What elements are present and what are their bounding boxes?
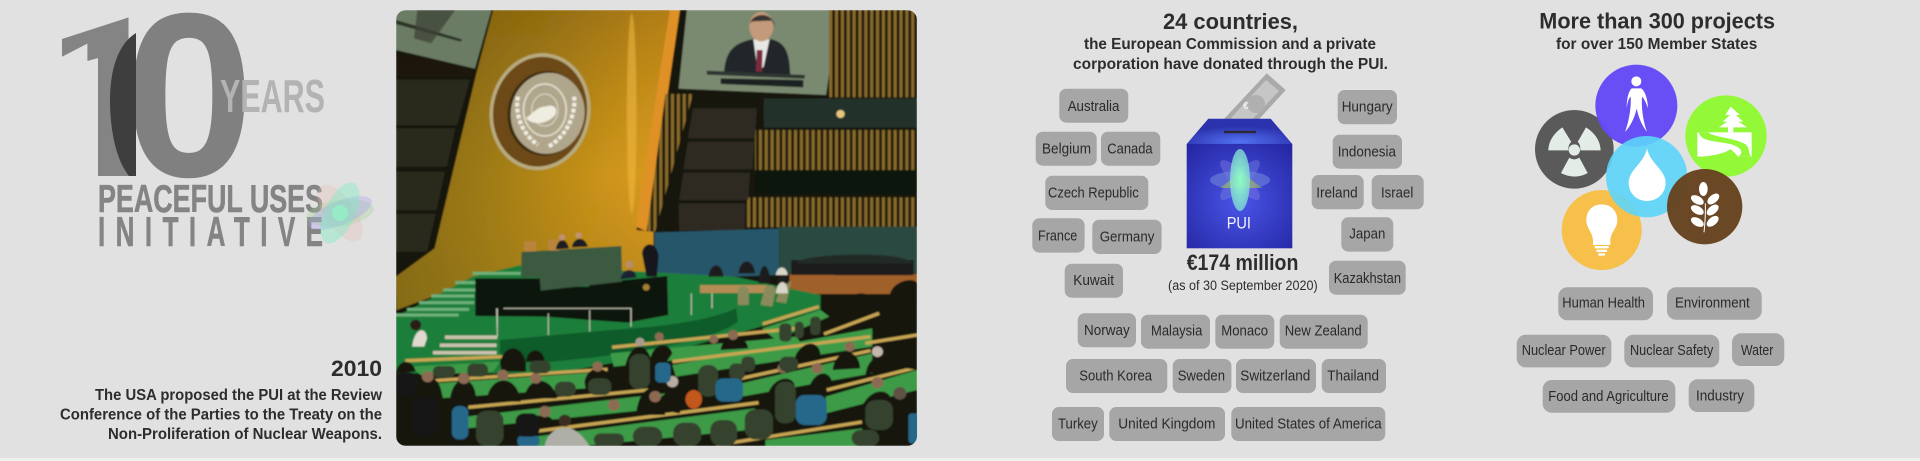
tag: Japan: Japan <box>1349 226 1385 242</box>
icon: nuclear power <box>1535 110 1614 189</box>
tag: Kazakhstan: Kazakhstan <box>1334 271 1401 287</box>
box front <box>1187 144 1292 248</box>
tag: Nuclear Power: Nuclear Power <box>1522 343 1606 359</box>
right wall stripes <box>829 10 917 97</box>
tag: Switzerland: Switzerland <box>1240 368 1310 384</box>
topic circles cluster <box>1535 65 1767 270</box>
tag: Sweden: Sweden <box>1178 368 1225 384</box>
YEARS label: YEARS <box>220 70 325 122</box>
tag: Water: Water <box>1741 343 1773 359</box>
tag: Japan <box>1341 217 1393 252</box>
icon: human health <box>1595 65 1677 147</box>
tag: United States of America: United States of America <box>1235 416 1383 432</box>
tag: Germany: Germany <box>1100 230 1155 246</box>
description: Non-Proliferation of Nuclear Weapons. <box>108 426 382 443</box>
tag: France <box>1032 218 1085 253</box>
tag: Switzerland <box>1236 359 1316 393</box>
INITIATIVE: INITIATIVE <box>98 209 323 256</box>
light suit <box>545 428 590 446</box>
gold wall <box>396 10 670 310</box>
tag: Nuclear Safety: Nuclear Safety <box>1630 343 1714 359</box>
gold desk edges <box>405 307 917 445</box>
PUI flower emblem <box>304 177 376 249</box>
PEACEFUL USES: PEACEFUL USES <box>98 178 323 221</box>
tag: South Korea <box>1066 359 1167 393</box>
heading: 24 countries <box>1073 9 1388 73</box>
tag: Kuwait <box>1065 264 1123 298</box>
left donor tags <box>1032 89 1162 298</box>
heading: More than 300 projects: More than 300 projects <box>1539 8 1775 33</box>
tag: Canada <box>1101 132 1160 166</box>
tag: Thailand <box>1322 359 1386 393</box>
tag: Hungary <box>1338 90 1397 124</box>
heads <box>410 320 906 417</box>
tag: Ireland <box>1312 175 1364 209</box>
total donated <box>1168 250 1318 293</box>
tag: Ireland: Ireland <box>1316 186 1358 202</box>
slot <box>1224 131 1256 133</box>
lower donor tags <box>1052 313 1386 441</box>
tag: Industry <box>1689 379 1754 412</box>
tag: Malaysia <box>1141 315 1210 349</box>
box label: PUI <box>1227 213 1251 232</box>
left dark wall panels <box>396 80 470 252</box>
year: 2010 <box>331 356 382 381</box>
tag: Food and Agriculture <box>1543 380 1675 413</box>
red hair delegate <box>685 390 702 409</box>
tag: Human Health: Human Health <box>1562 296 1645 312</box>
tag: Belgium <box>1036 132 1097 166</box>
tag: Thailand: Thailand <box>1327 368 1379 384</box>
tag: United States of America <box>1231 407 1385 441</box>
description: Conference of the Parties to the Treaty on the <box>60 406 382 424</box>
blue seats <box>452 363 918 446</box>
icon: banknote: € <box>1243 101 1249 112</box>
tag: South Korea: South Korea <box>1079 368 1153 384</box>
green desks <box>410 310 917 446</box>
tag: Australia: Australia <box>1068 99 1120 115</box>
booth window <box>764 98 917 128</box>
PUI flower on box <box>1210 149 1270 211</box>
tag: United Kingdom: United Kingdom <box>1118 416 1215 432</box>
tag: Environment: Environment <box>1675 296 1750 312</box>
green floor <box>396 265 821 373</box>
member states subheading: for over 150 Member States <box>1556 36 1757 53</box>
heading: 24 countries: 24 countries, <box>1163 9 1298 34</box>
icon: banknote <box>1224 73 1286 133</box>
seat backs <box>433 317 893 446</box>
tag: Food and Agriculture: Food and Agriculture <box>1548 389 1669 405</box>
donors subheading: corporation have donated through the PUI. <box>1073 56 1388 73</box>
donors subheading: the European Commission and a private <box>1084 36 1376 53</box>
photo: UN General Assembly hall <box>396 10 918 446</box>
tag: Czech Republic <box>1045 176 1148 210</box>
description: The USA proposed the PUI at the Review <box>95 387 383 404</box>
tag: Malaysia: Malaysia <box>1151 323 1203 339</box>
stairs <box>396 273 521 315</box>
numeral overlap shadow <box>110 33 136 176</box>
icon: industry <box>1562 190 1642 270</box>
box lid <box>1187 119 1292 144</box>
tag: Israel <box>1372 175 1424 209</box>
tag: Monaco: Monaco <box>1221 323 1268 339</box>
tag: Hungary: Hungary <box>1342 100 1393 116</box>
tag: United Kingdom <box>1109 407 1225 441</box>
tag: Norway <box>1078 313 1136 347</box>
right delegates <box>700 255 914 307</box>
icon: water <box>1606 136 1687 217</box>
tag: Turkey <box>1052 407 1104 441</box>
screens <box>396 10 491 69</box>
tag: New Zealand <box>1280 315 1368 349</box>
tag: Turkey: Turkey <box>1058 416 1098 432</box>
tag: Indonesia: Indonesia <box>1338 144 1397 160</box>
white-shirt delegate <box>412 330 427 347</box>
tag: France: France <box>1038 228 1077 244</box>
icon: environment <box>1685 95 1767 177</box>
tag: Nuclear Power <box>1517 335 1611 367</box>
tag: Canada: Canada <box>1107 142 1153 158</box>
UN emblem <box>488 52 592 172</box>
right donor tags <box>1312 90 1424 295</box>
tag: Sweden <box>1173 359 1231 393</box>
tag: Belgium: Belgium <box>1042 142 1091 158</box>
tag: New Zealand: New Zealand <box>1285 323 1362 339</box>
orange pillar <box>636 10 680 232</box>
blue wall <box>654 229 779 277</box>
speaker on screen <box>707 12 805 87</box>
dark seats <box>396 373 540 437</box>
tag: Norway: Norway <box>1084 323 1130 339</box>
dark panels <box>679 108 757 231</box>
rail <box>497 290 712 337</box>
icon: food and agriculture <box>1667 169 1742 244</box>
tag: Germany <box>1092 220 1162 254</box>
logo: 10 Years Peaceful Uses Initiative <box>62 12 374 246</box>
heading: More than 300 projects <box>1539 8 1775 53</box>
donors subheading <box>1073 36 1388 73</box>
tag: Industry: Industry <box>1696 388 1745 404</box>
tag: Czech Republic: Czech Republic <box>1048 186 1139 202</box>
text block: 2010 milestone <box>60 356 383 443</box>
tag: Kuwait: Kuwait <box>1073 273 1114 289</box>
total donated: €174 million <box>1187 250 1298 275</box>
icon: PUI donation box <box>1187 73 1292 248</box>
project topic tags <box>1517 287 1784 413</box>
tag: Australia <box>1059 89 1128 123</box>
description <box>60 387 383 443</box>
tag: Environment <box>1667 287 1762 320</box>
tag: Nuclear Safety <box>1624 335 1719 367</box>
tag: Water <box>1732 333 1784 366</box>
tag: Indonesia <box>1333 135 1402 169</box>
tag: Israel: Israel <box>1381 186 1413 202</box>
people <box>396 280 917 446</box>
tag: Monaco <box>1215 315 1274 349</box>
seating rows <box>396 280 918 446</box>
rostrum <box>475 276 668 323</box>
tag: Kazakhstan <box>1329 261 1406 295</box>
date note: (as of 30 September 2020) <box>1168 278 1318 293</box>
tag: Human Health <box>1558 287 1653 320</box>
